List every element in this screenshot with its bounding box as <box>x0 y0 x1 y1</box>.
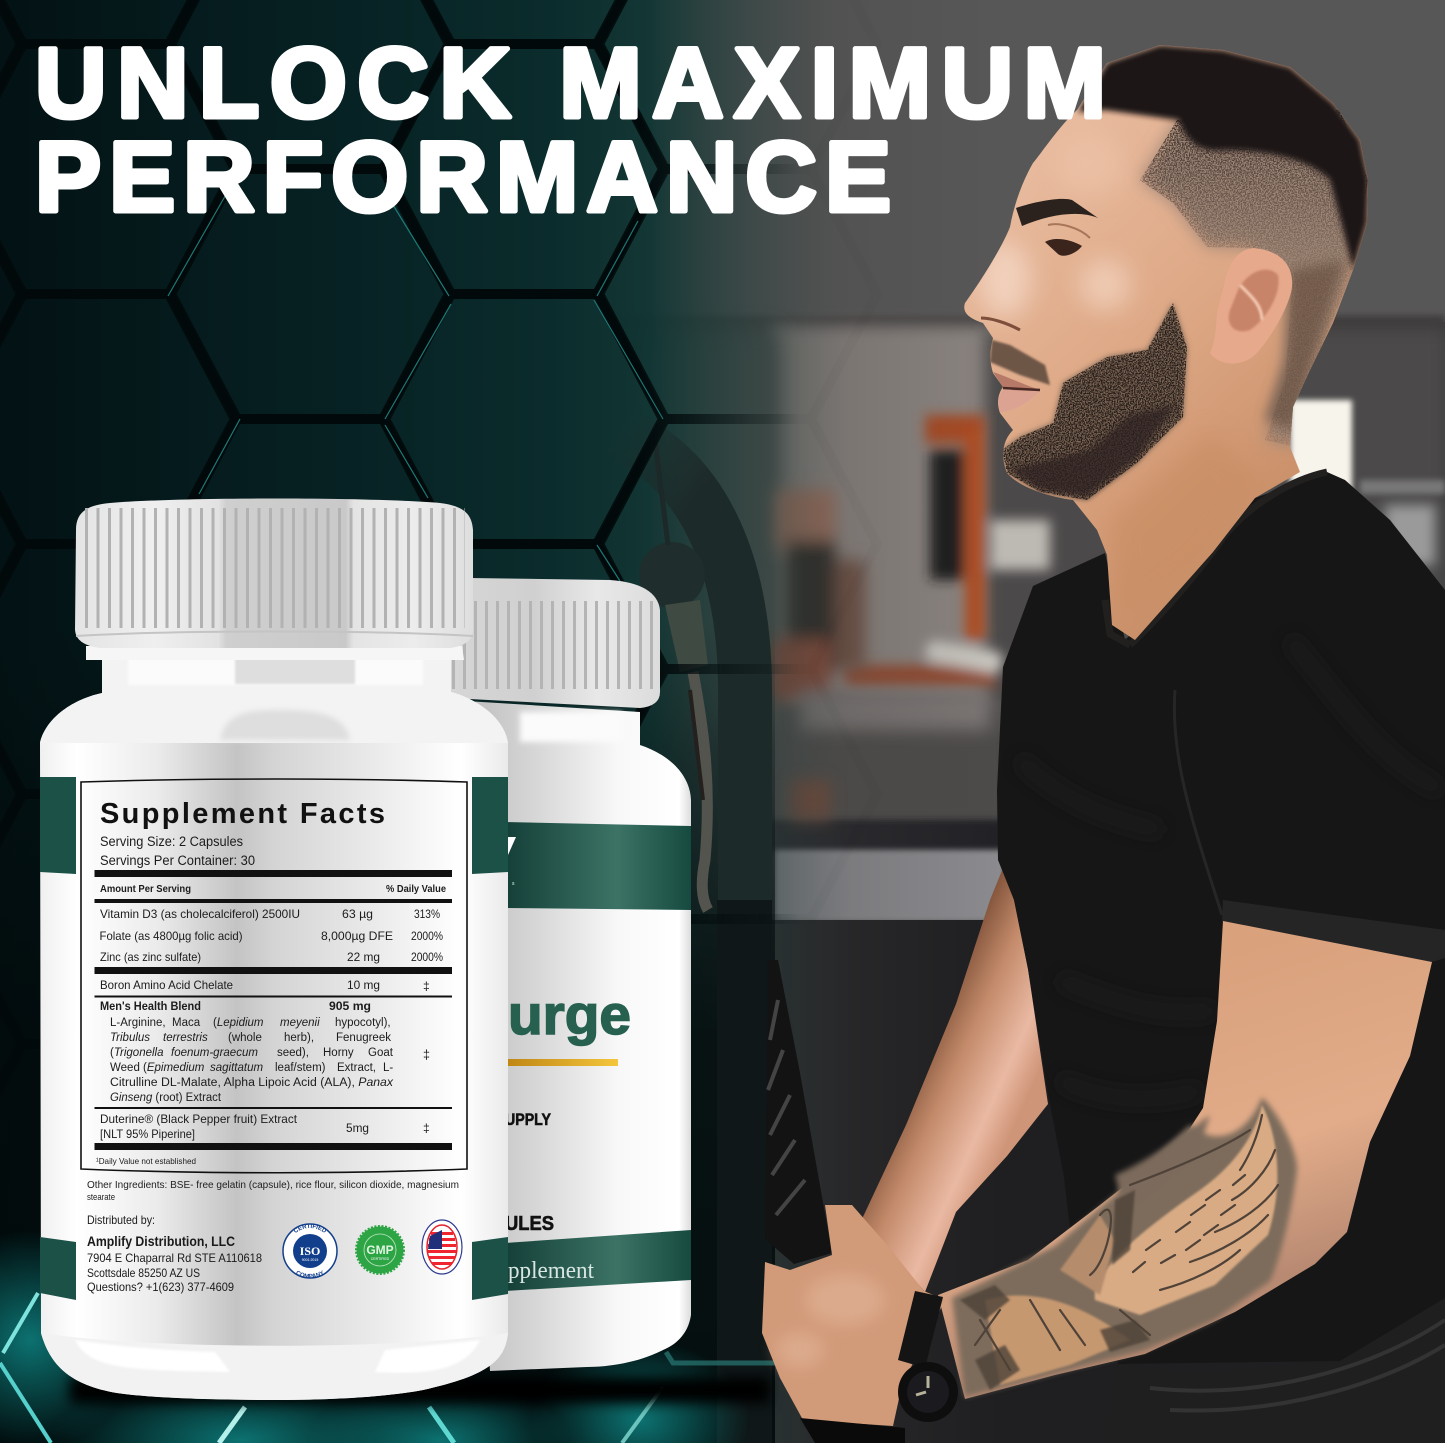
title: PERFORMANCE <box>35 121 891 232</box>
mens health blend: hypocotyl), <box>335 1017 391 1029</box>
table rules <box>94 870 452 1150</box>
table header: Amount Per Serving <box>100 884 191 895</box>
mens health blend: meyenii <box>280 1017 320 1029</box>
blurred weights rack <box>770 490 990 820</box>
mens health blend: Lepidium <box>217 1017 264 1029</box>
mens health blend: ( <box>110 1047 114 1059</box>
rope <box>765 960 832 1264</box>
badge: ISO: 9001:2015 <box>302 1258 318 1262</box>
mens health blend: Maca <box>172 1017 201 1029</box>
distributor block <box>87 1213 262 1294</box>
back bottle top band <box>505 822 691 910</box>
mens health blend: Epimedium <box>147 1062 205 1074</box>
cable ball and carabiner <box>639 440 708 910</box>
serving info <box>100 834 255 868</box>
distributor block: Scottsdale 85250 AZ US <box>87 1266 200 1280</box>
distributor block: Amplify Distribution, LLC <box>87 1233 235 1249</box>
watch <box>898 1291 958 1422</box>
tattoo: winged figure <box>952 1097 1297 1397</box>
nutrient rows: 8,000µg DFE <box>321 929 393 943</box>
duterine row: ‡ <box>423 1121 430 1135</box>
bottle body <box>40 650 508 1400</box>
orange gym machine <box>845 415 1050 687</box>
front bottle <box>40 498 508 1400</box>
lower darkening <box>0 620 775 1443</box>
serving info: Serving Size: 2 Capsules <box>100 834 243 849</box>
nutrient rows: 2000% <box>411 950 443 964</box>
beard <box>1002 303 1187 500</box>
title <box>35 27 1106 232</box>
mens health blend: Goat <box>368 1047 394 1059</box>
hand knuckle highlights <box>776 1274 885 1368</box>
badge: ISO: COMPANY <box>296 1270 323 1278</box>
supplement facts panel <box>81 779 467 1173</box>
supply text: UPPLY <box>505 1110 552 1129</box>
tattoo feathers <box>975 1115 1278 1370</box>
back bottle cap <box>450 578 660 708</box>
nutrient rows: 63 µg <box>342 907 373 921</box>
mens health blend <box>100 1001 430 1104</box>
head details <box>979 45 1368 620</box>
badge: ISO: ISO <box>300 1244 320 1258</box>
mens health blend: Men's Health Blend <box>100 1001 201 1013</box>
mens health blend: L-Arginine, <box>110 1017 166 1029</box>
mens health blend: Weed ( <box>110 1062 147 1074</box>
panel border <box>81 779 467 1173</box>
hand <box>762 1205 945 1426</box>
badge: USA flag <box>422 1220 462 1274</box>
eyebrow <box>1016 199 1098 226</box>
handle bar <box>800 1418 905 1443</box>
nutrient rows: ‡ <box>423 979 430 993</box>
mens health blend: terrestris <box>163 1032 208 1044</box>
mens health blend: foenum-graecum <box>171 1047 258 1059</box>
nutrient rows: 313% <box>414 907 440 921</box>
badge: ISO <box>282 1223 338 1279</box>
man <box>762 45 1445 1443</box>
other ingredients: Other Ingredients: BSE- free gelatin (capsule), rice flour, silicon dioxide, magnesium <box>87 1180 459 1191</box>
tattoo dark patches <box>960 1190 1150 1390</box>
shirt <box>997 472 1445 1364</box>
badge: GMP: GMP <box>366 1243 394 1257</box>
nutrient rows: Folate (as 4800µg folic acid) <box>100 929 242 943</box>
mens health blend: sagittatum <box>210 1062 263 1074</box>
duterine row: Duterine® (Black Pepper fruit) Extract <box>100 1112 298 1126</box>
footnote: ¹Daily Value not established <box>96 1156 196 1166</box>
bottle cap <box>75 498 473 660</box>
mens health blend: ( <box>213 1017 217 1029</box>
nutrient rows: Vitamin D3 (as cholecalciferol) 2500IU <box>100 907 300 921</box>
nostril <box>981 318 1020 330</box>
bottle gloss <box>40 650 508 1400</box>
nutrient rows: Boron Amino Acid Chelate <box>100 978 233 992</box>
mens health blend: ‡ <box>423 1048 430 1062</box>
mens health blend: Trigonella <box>114 1047 164 1059</box>
other ingredients: stearate <box>87 1192 115 1203</box>
mens health blend: Horny <box>323 1047 354 1059</box>
distributor block: Questions? +1(623) 377-4609 <box>87 1280 234 1294</box>
back bottle <box>450 578 691 1371</box>
nutrient rows: Zinc (as zinc sulfate) <box>100 950 201 964</box>
back bottle lower band <box>505 1230 691 1291</box>
cable machine arch <box>615 432 772 1443</box>
duterine row <box>100 1112 430 1141</box>
back bottle product name: urge <box>508 983 631 1046</box>
duterine row: [NLT 95% Piperine] <box>100 1127 195 1141</box>
mustache <box>990 340 1050 385</box>
mens health blend: Ginseng (root) Extract <box>110 1092 222 1104</box>
supplement text: pplement <box>508 1258 594 1284</box>
mens health blend: Extract, <box>337 1062 376 1074</box>
nutrient rows <box>100 907 443 993</box>
distributor block: 7904 E Chaparral Rd STE A110618 <box>87 1251 262 1265</box>
nutrient rows: 10 mg <box>347 978 380 992</box>
mens health blend: herb), <box>284 1032 314 1044</box>
mens health blend: Tribulus <box>110 1032 150 1044</box>
mens health blend: 905 mg <box>329 1001 371 1013</box>
nutrient rows: 2000% <box>411 929 443 943</box>
back bottle logo fragment <box>508 837 516 887</box>
glowing floor hexagon lines <box>0 1230 775 1443</box>
eye <box>1045 239 1082 256</box>
pants <box>1100 1298 1445 1443</box>
dark hair cap <box>1078 45 1368 270</box>
duterine row: 5mg <box>346 1121 369 1135</box>
lips <box>993 372 1040 392</box>
label teal bands <box>40 777 508 1300</box>
hexagon pattern <box>0 0 790 924</box>
mens health blend: Fenugreek <box>336 1032 391 1044</box>
far forearm <box>862 868 1048 1292</box>
table header: % Daily Value <box>386 884 446 895</box>
badge: ISO: CERTIFIED <box>294 1224 326 1232</box>
mens health blend: L- <box>383 1062 393 1074</box>
serving info: Servings Per Container: 30 <box>100 853 255 868</box>
gold rule <box>505 1059 618 1066</box>
mens health blend: leaf/stem) <box>275 1062 326 1074</box>
badge: GMP: CERTIFIED <box>371 1257 390 1261</box>
teal gradient overlay <box>0 0 1000 1443</box>
mens health blend: Citrulline DL-Malate, Alpha Lipoic Acid (ALA), Panax <box>110 1077 394 1089</box>
back bottle logo fragment: s <box>512 881 515 887</box>
nutrient rows: 22 mg <box>347 950 380 964</box>
mens health blend: seed), <box>277 1047 309 1059</box>
badge: GMP <box>356 1226 404 1274</box>
hair fade underlayer <box>1140 110 1368 447</box>
mens health blend: (whole <box>228 1032 262 1044</box>
head and neck <box>964 45 1368 640</box>
capsules text: ULES <box>505 1213 554 1235</box>
other ingredients <box>87 1180 459 1203</box>
distributor block: Distributed by: <box>87 1213 155 1227</box>
near arm <box>938 921 1432 1399</box>
panel heading: Supplement Facts <box>100 798 385 830</box>
ear <box>1210 248 1292 363</box>
back bottle neck highlight <box>520 712 622 742</box>
title: UNLOCK MAXIMUM <box>35 27 1106 138</box>
table header <box>100 884 446 895</box>
